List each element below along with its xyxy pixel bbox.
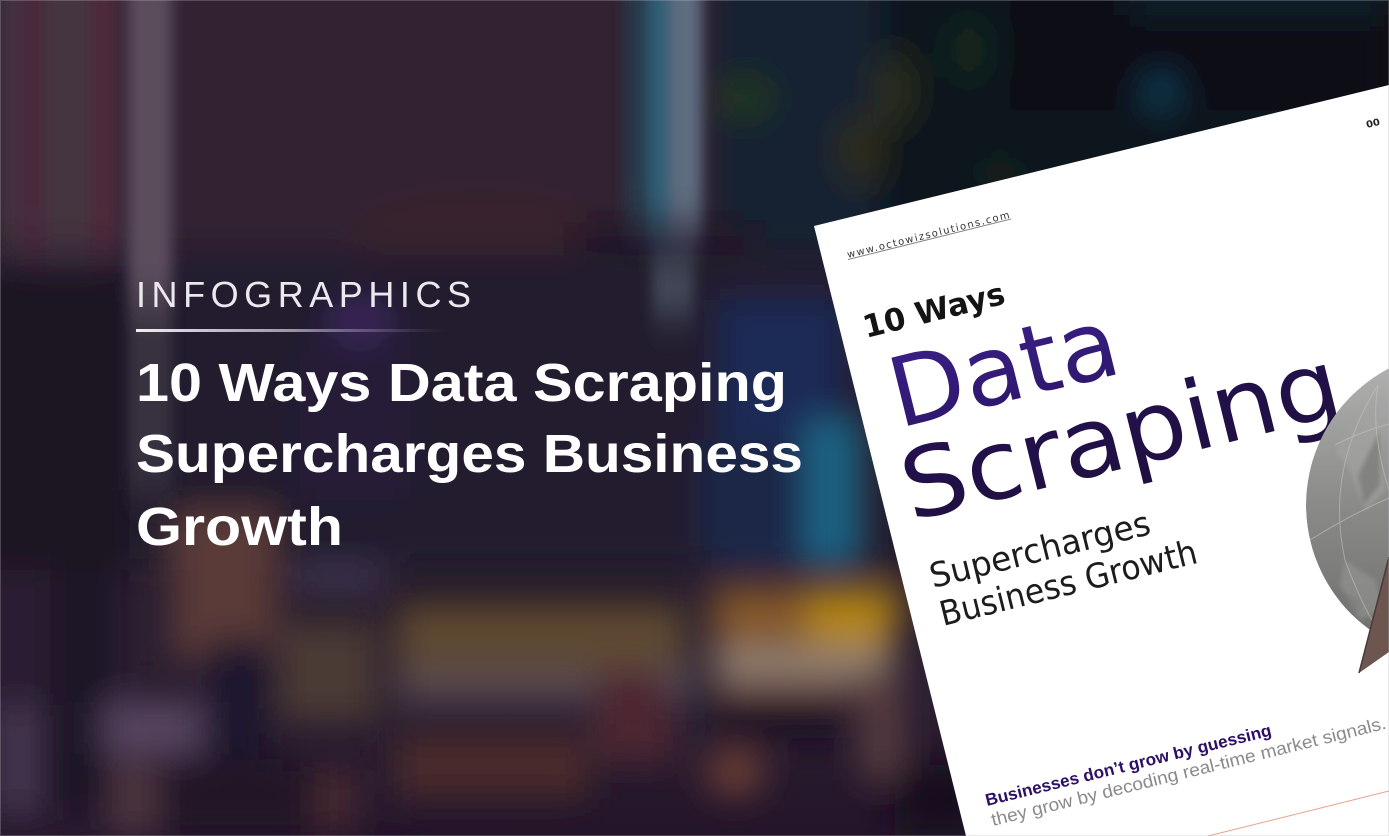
tilted infographic preview page bbox=[814, 85, 1389, 836]
main title bbox=[136, 353, 803, 557]
preview heading: Scraping: Scraping bbox=[890, 327, 1351, 543]
tagline: they grow by decoding real-time market signals. bbox=[989, 713, 1388, 830]
preview heading: Data: Data bbox=[878, 286, 1130, 450]
main title: 10 Ways Data Scraping bbox=[136, 353, 787, 413]
main title: Supercharges Business bbox=[136, 424, 803, 484]
preview subheading: Business Growth bbox=[936, 532, 1201, 635]
preview subheading: Supercharges bbox=[926, 504, 1155, 597]
icon: paper plane bbox=[1359, 557, 1389, 673]
page number: 00 bbox=[1365, 117, 1382, 131]
page sheet bbox=[814, 85, 1389, 836]
divider rule bbox=[136, 329, 446, 332]
tagline: Businesses don’t grow by guessing bbox=[983, 721, 1273, 810]
icon: globe bbox=[1306, 368, 1389, 630]
preview heading: 10 Ways: 10 Ways bbox=[859, 276, 1009, 346]
main title: Growth bbox=[136, 497, 343, 557]
eyebrow label: INFOGRAPHICS bbox=[136, 274, 471, 315]
website url: www.octowizsolutions.com bbox=[846, 210, 1011, 261]
orange footer line bbox=[1208, 791, 1389, 836]
